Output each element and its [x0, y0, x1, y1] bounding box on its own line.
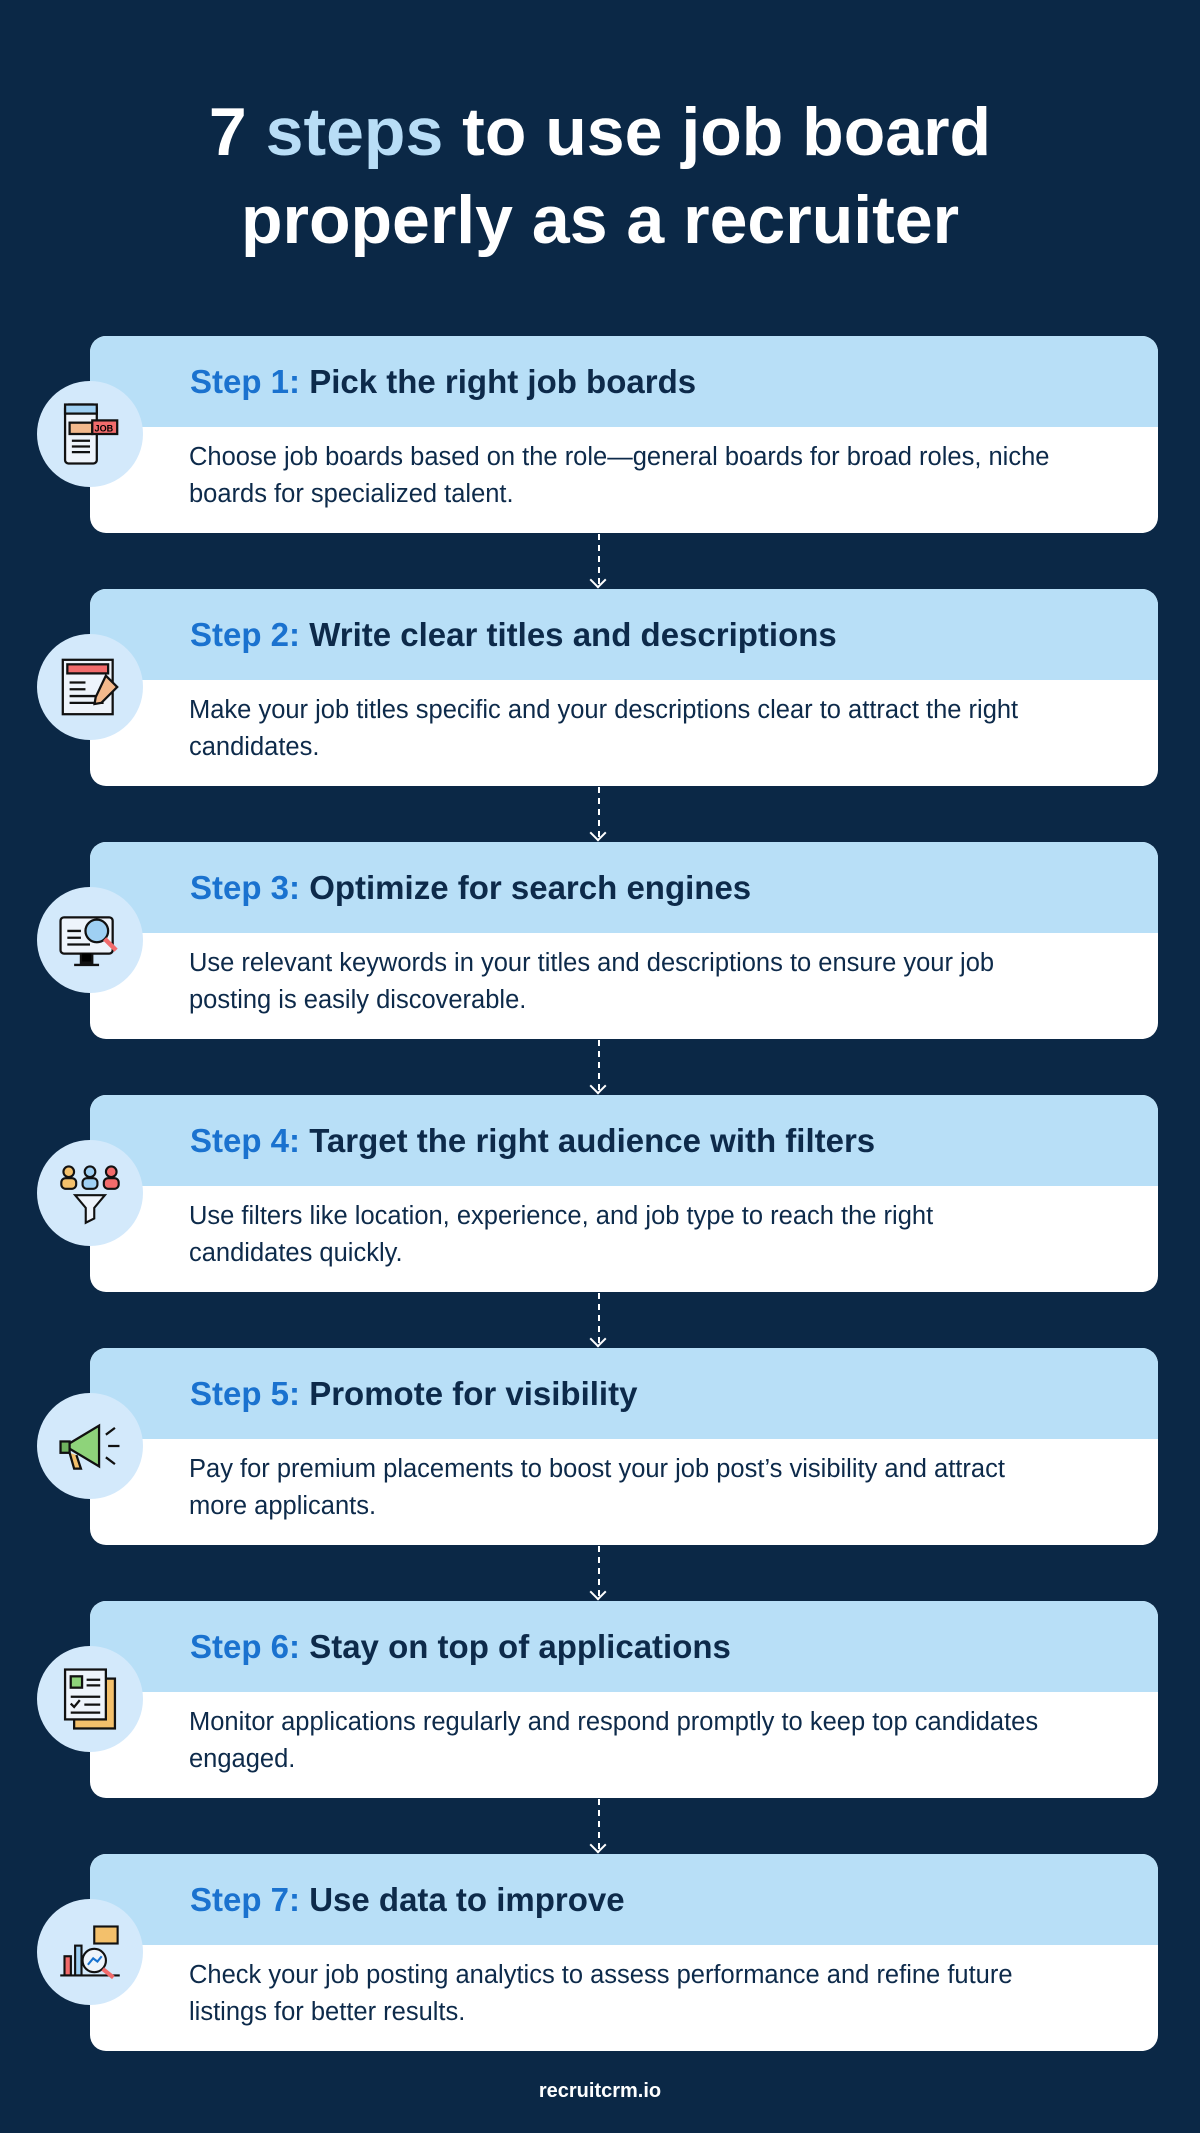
- card: step 7: Step 7: Use data to improve: [190, 1881, 625, 1918]
- card: step 6: Monitor applications regularly and respond promptly to keep top candidates engaged.: [189, 1708, 1038, 1773]
- card: step 5: [90, 1348, 1158, 1545]
- arrow 6: [598, 1799, 600, 1849]
- icon: step 6 applications: [37, 1646, 143, 1752]
- arrow 3: [598, 1040, 600, 1090]
- card: step 7: [90, 1854, 1158, 2051]
- card: step 1: [90, 336, 1158, 533]
- arrow 2: [598, 787, 600, 837]
- icon: step 4 people filter: [37, 1140, 143, 1246]
- arrow 1: [598, 534, 600, 584]
- footer: recruitcrm.io: [539, 2080, 661, 2102]
- icon: step 1 phone job: [37, 381, 143, 487]
- card: step 3: Step 3: Optimize for search engines: [190, 869, 751, 906]
- icon: step 1 phone job: JOB: [95, 424, 114, 434]
- card: step 1: Step 1: Pick the right job boards: [190, 363, 696, 400]
- card: step 2: Make your job titles specific and your descriptions clear to attract the right candidates.: [189, 696, 1018, 761]
- icon: step 7 analytics: [37, 1899, 143, 2005]
- icon: step 3 monitor search: [37, 887, 143, 993]
- card: step 2: Step 2: Write clear titles and descriptions: [190, 616, 837, 653]
- card: step 5: Step 5: Promote for visibility: [190, 1375, 637, 1412]
- card: step 4: Step 4: Target the right audience with filters: [190, 1122, 875, 1159]
- card: step 5: Pay for premium placements to boost your job post’s visibility and attract more applicants.: [189, 1455, 1005, 1520]
- card: step 6: Step 6: Stay on top of applications: [190, 1628, 731, 1665]
- icon: step 2 document: [37, 634, 143, 740]
- title: properly as a recruiter: [241, 182, 959, 258]
- icon: step 5 megaphone: [37, 1393, 143, 1499]
- card: step 2: [90, 589, 1158, 786]
- title: [209, 94, 991, 258]
- card: step 1: Choose job boards based on the role—general boards for broad roles, niche boards for specialized talent.: [189, 443, 1049, 508]
- arrow 4: [598, 1293, 600, 1343]
- card: step 4: [90, 1095, 1158, 1292]
- card: step 3: [90, 842, 1158, 1039]
- card: step 7: Check your job posting analytics to assess performance and refine future listings for better results.: [189, 1961, 1013, 2026]
- title: 7 steps to use job board: [209, 94, 991, 170]
- card: step 3: Use relevant keywords in your titles and descriptions to ensure your job posting is easily discoverable.: [189, 949, 994, 1014]
- card: step 4: Use filters like location, experience, and job type to reach the right candidates quickly.: [189, 1202, 933, 1267]
- arrow 5: [598, 1546, 600, 1596]
- card: step 6: [90, 1601, 1158, 1798]
